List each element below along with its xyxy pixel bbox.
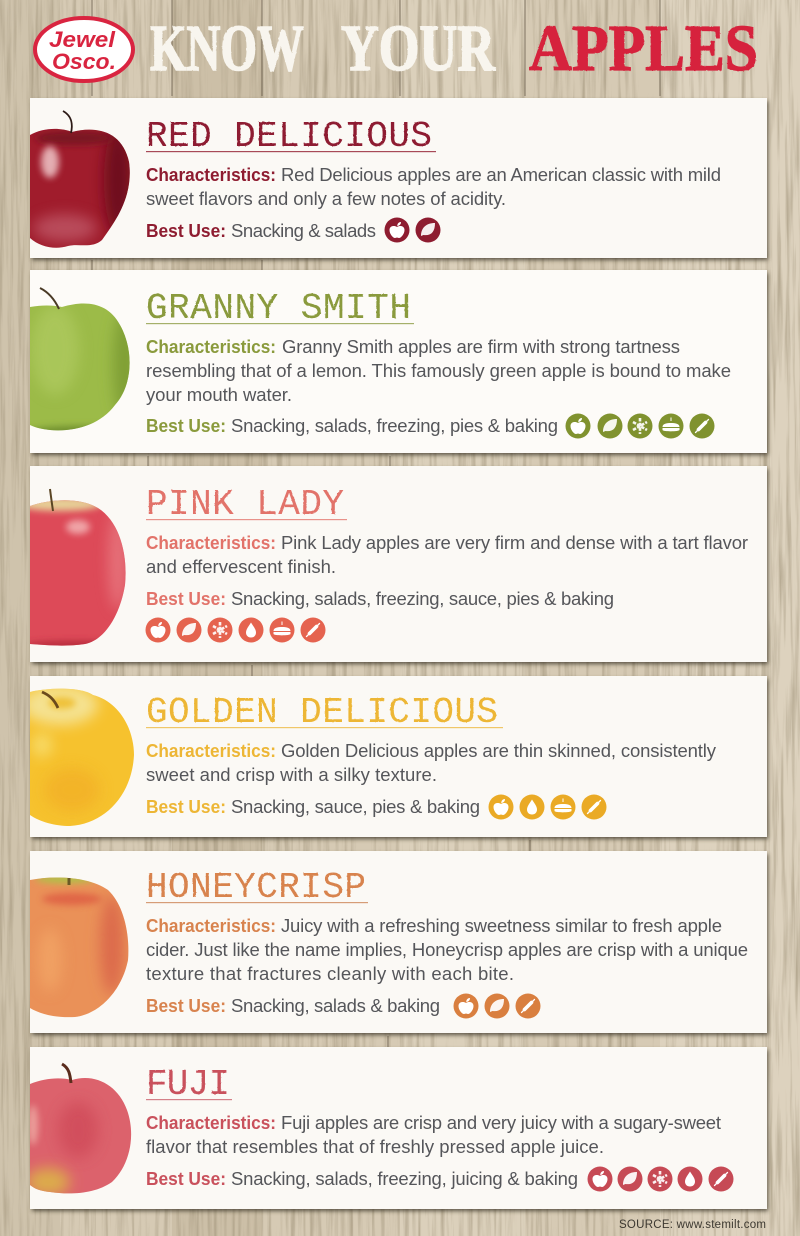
characteristics: texture that fractures cleanly with each bite. <box>146 963 514 984</box>
title <box>150 12 758 85</box>
heading: PINK LADY <box>146 484 344 525</box>
apple: Fuji <box>26 1064 136 1197</box>
characteristics: Characteristics: <box>146 165 276 185</box>
apple: Pink Lady <box>30 488 126 646</box>
best use: Snacking, sauce, pies & baking <box>231 796 480 817</box>
characteristics: Characteristics: <box>146 741 276 761</box>
characteristics: Characteristics: <box>146 916 276 936</box>
logo: Jewel Osco <box>35 18 133 81</box>
apple: Granny Smith <box>30 287 130 430</box>
characteristics: your mouth water. <box>146 384 292 405</box>
characteristics: Red Delicious apples are an American classic with mild <box>281 164 721 185</box>
title: YOUR <box>341 12 496 85</box>
use icons <box>454 994 540 1018</box>
characteristics: and effervescent finish. <box>146 556 336 577</box>
best use: Best Use: <box>146 996 226 1016</box>
heading: RED DELICIOUS <box>146 116 432 157</box>
best use: Best Use: <box>146 221 226 241</box>
apple: Red Delicious <box>30 111 135 255</box>
use icons <box>488 794 606 820</box>
panel: Pink Lady <box>18 466 768 664</box>
title: KNOW <box>150 12 304 85</box>
characteristics: Golden Delicious apples are thin skinned, consistently <box>281 740 717 761</box>
characteristics <box>146 532 748 577</box>
panel: Golden Delicious <box>22 676 768 839</box>
best use <box>146 220 376 241</box>
apple: Golden Delicious <box>30 688 134 826</box>
characteristics: Pink Lady apples are very firm and dense with a tart flavor <box>281 532 748 553</box>
characteristics <box>146 915 748 984</box>
heading: GOLDEN DELICIOUS <box>146 692 498 733</box>
best use: Best Use: <box>146 1169 226 1189</box>
best use: Best Use: <box>146 589 226 609</box>
characteristics: Characteristics: <box>146 533 276 553</box>
characteristics: flavor that resembles that of freshly pressed apple juice. <box>146 1136 604 1157</box>
best use: Snacking & salads <box>231 220 376 241</box>
panel: Granny Smith <box>20 270 768 455</box>
characteristics: Granny Smith apples are firm with strong tartness <box>282 336 680 357</box>
characteristics: Juicy with a refreshing sweetness similar to fresh apple <box>281 915 722 936</box>
best use: Snacking, salads, freezing, pies & baking <box>231 415 558 436</box>
characteristics <box>146 740 717 785</box>
characteristics: sweet flavors and only a few notes of acidity. <box>146 188 506 209</box>
use icons <box>588 1166 734 1192</box>
panel: Honeycrisp <box>30 851 768 1035</box>
use icons <box>384 218 440 242</box>
characteristics: resembling that of a lemon. This famously green apple is bound to make <box>146 360 731 381</box>
characteristics: Characteristics: <box>146 1113 276 1133</box>
heading: GRANNY SMITH <box>146 288 411 329</box>
best use: Snacking, salads, freezing, sauce, pies & baking <box>231 588 614 609</box>
characteristics: Fuji apples are crisp and very juicy with a sugary-sweet <box>281 1112 721 1133</box>
title: APPLES <box>529 12 758 85</box>
characteristics: sweet and crisp with a silky texture. <box>146 764 437 785</box>
heading: HONEYCRISP <box>146 867 366 908</box>
characteristics <box>146 164 721 209</box>
apple: Honeycrisp <box>30 872 132 1022</box>
characteristics: Characteristics: <box>146 337 276 357</box>
heading: FUJI <box>146 1064 230 1105</box>
characteristics <box>146 336 731 405</box>
source credit: SOURCE: www.stemilt.com <box>619 1219 766 1231</box>
characteristics: cider. Just like the name implies, Honeycrisp apples are crisp with a unique <box>146 939 748 960</box>
best use: Snacking, salads, freezing, juicing & baking <box>231 1168 578 1189</box>
logo: Jewel Osco: Jewel <box>49 27 116 52</box>
characteristics <box>146 1112 721 1157</box>
best use: Snacking, salads & baking <box>231 995 440 1016</box>
logo: Jewel Osco: Osco. <box>52 49 116 74</box>
panel: Fuji <box>26 1047 768 1211</box>
best use: Best Use: <box>146 416 226 436</box>
best use: Best Use: <box>146 797 226 817</box>
panel: Red Delicious <box>30 98 768 260</box>
use icons <box>146 618 326 642</box>
use icons <box>566 414 714 438</box>
